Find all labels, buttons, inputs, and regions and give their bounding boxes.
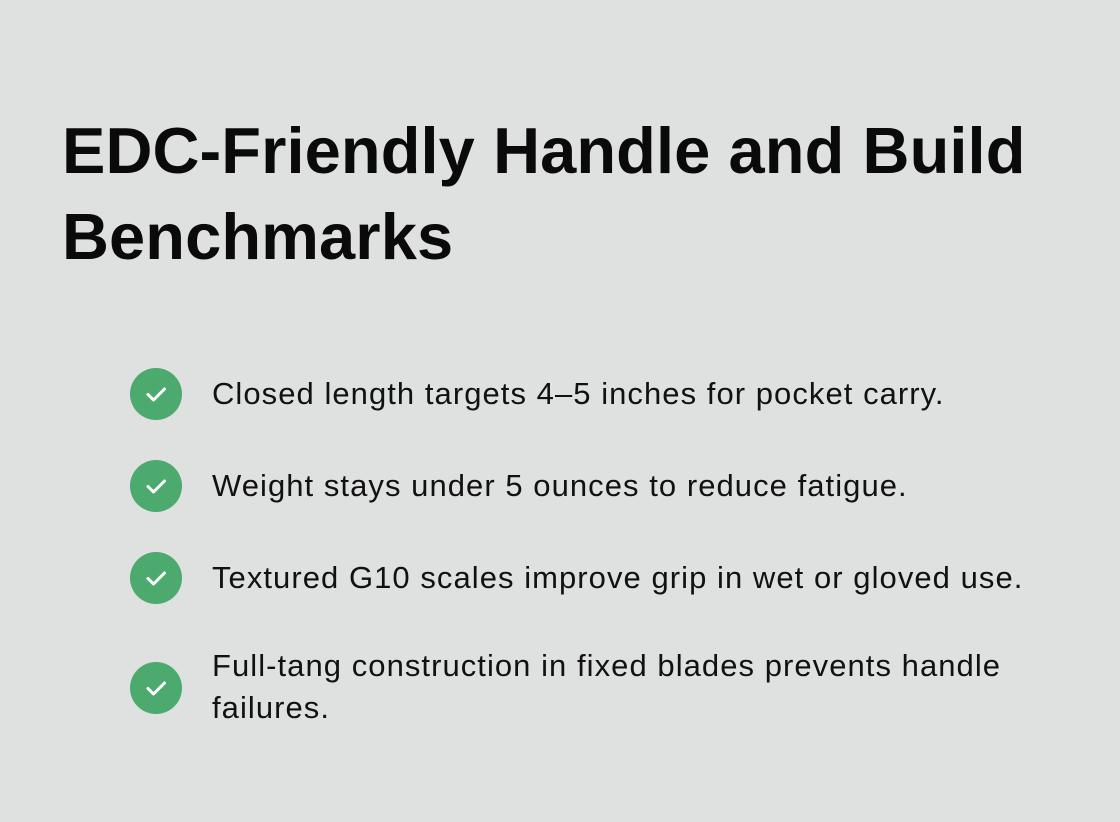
- item 4: [130, 648, 1001, 725]
- item 2: [130, 460, 908, 512]
- text: Textured G10 scales improve grip in wet or gloved use.: [212, 560, 1023, 595]
- icon: check: [130, 460, 182, 512]
- item 3: [130, 552, 1023, 604]
- title: EDC-Friendly Handle and Build Benchmarks: [62, 114, 1026, 273]
- text: Full-tang construction in fixed blades prevents handle: [212, 648, 1001, 683]
- text: [212, 648, 1001, 725]
- icon: check: [130, 552, 182, 604]
- item 1: [130, 368, 945, 420]
- icon: check: [130, 368, 182, 420]
- text: Closed length targets 4–5 inches for pocket carry.: [212, 376, 945, 411]
- text: Weight stays under 5 ounces to reduce fatigue.: [212, 468, 908, 503]
- icon: check: [130, 662, 182, 714]
- text: failures.: [212, 690, 330, 725]
